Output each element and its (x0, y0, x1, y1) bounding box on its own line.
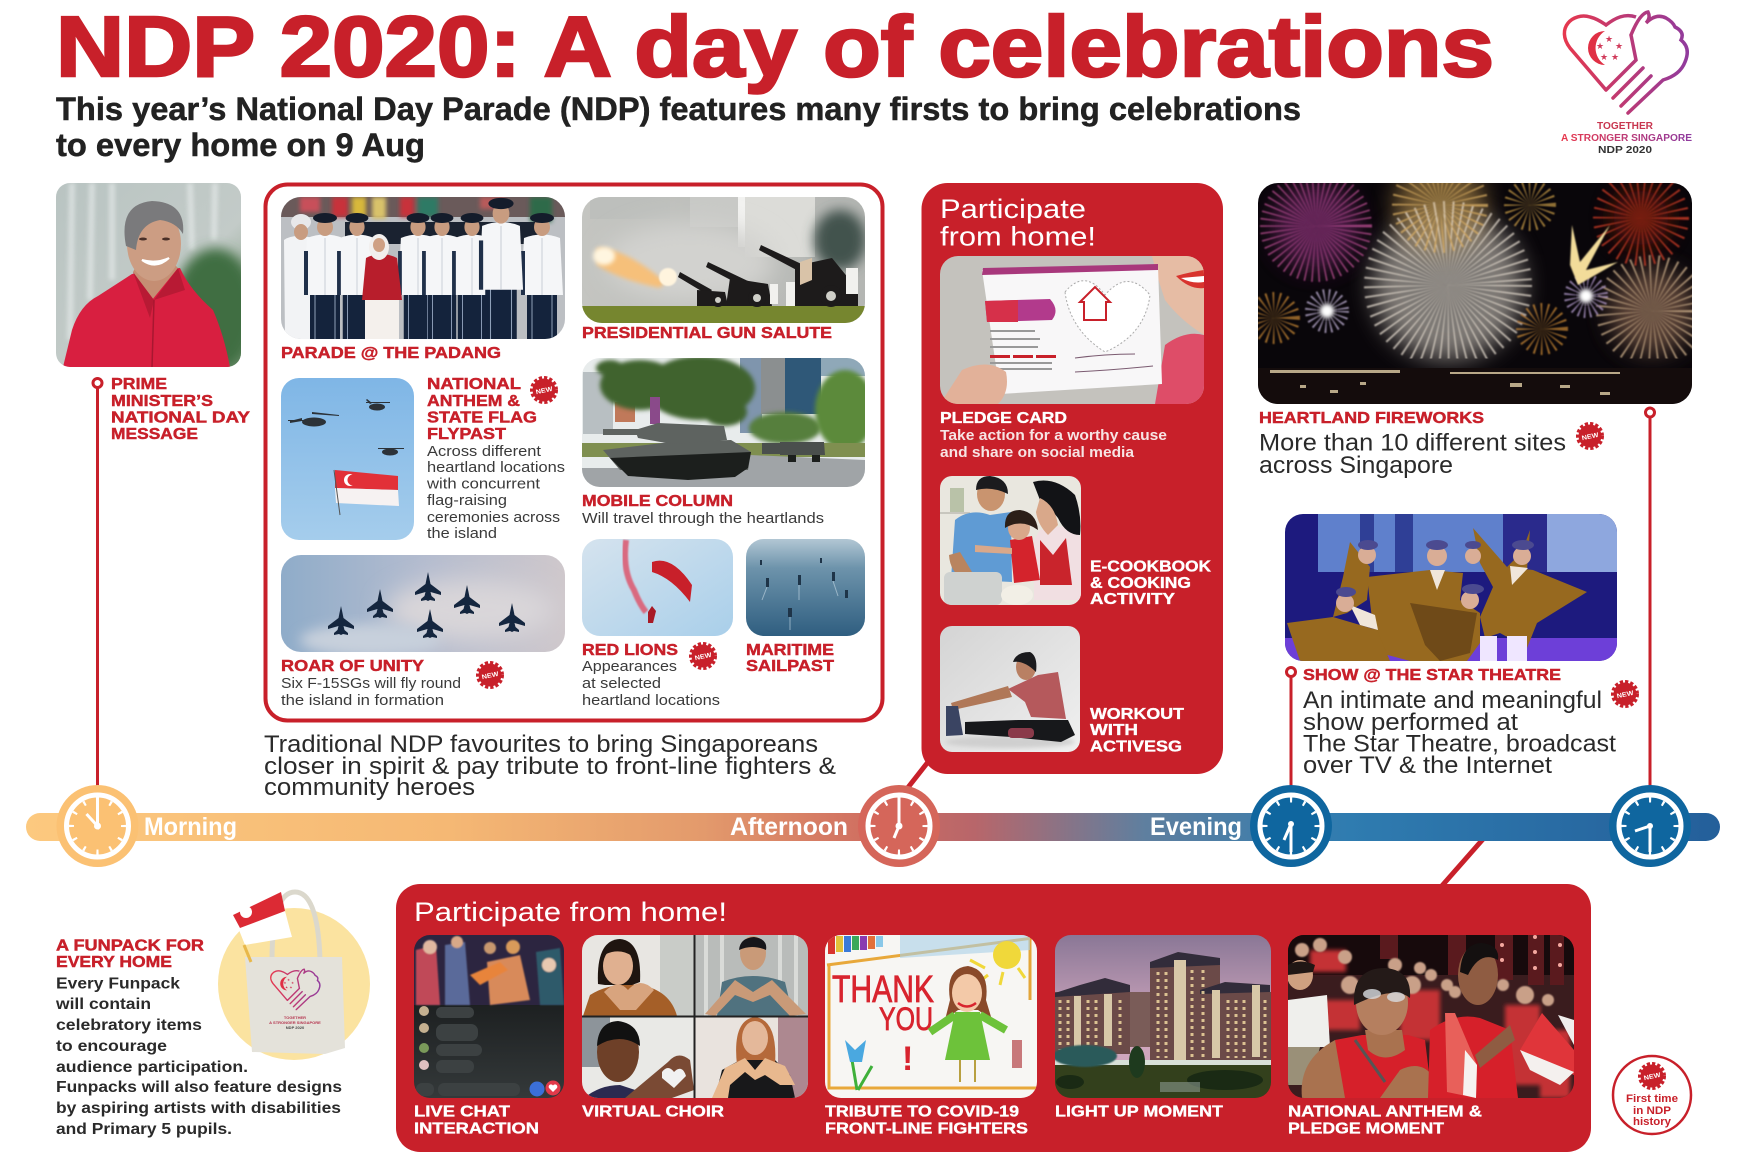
photo: workout stretching man (940, 626, 1080, 752)
label: Roar of Unity: ROAR OF UNITY (281, 658, 424, 675)
icon: new badge, flypast (532, 378, 556, 402)
photo: Mobile column tank (582, 356, 875, 487)
label: workout with ActiveSG: WITH (1090, 722, 1138, 739)
text: funpack description: EVERY HOME (56, 954, 172, 971)
clock: night (1609, 785, 1691, 867)
heading: participate from home: from home! (940, 222, 1096, 252)
photo: Maritime sailpast (746, 539, 865, 636)
icon: new badge, Red Lions (692, 644, 714, 668)
legend: first time in NDP history: in NDP (1633, 1105, 1671, 1117)
icon: new badge, fireworks (1578, 424, 1602, 448)
clock: afternoon (858, 785, 940, 867)
label: Prime Minister's National Day message: MESSAGE (111, 426, 198, 443)
label: Afternoon: Afternoon (730, 813, 848, 841)
photo: cooking family (940, 476, 1081, 605)
label: live chat interaction (414, 1104, 539, 1138)
connector: afternoon to participate panel (906, 762, 928, 790)
photo: Roar of Unity jets (281, 555, 565, 656)
legend: first time in NDP history (1613, 1056, 1691, 1134)
text: traditional favourites caption: Traditional NDP favourites to bring Singaporeans (264, 731, 818, 758)
label: show at The Star Theatre: An intimate and meaningful (1303, 687, 1602, 714)
icon: new badge, Roar of Unity (478, 664, 502, 686)
logo: NDP 2020 heart (1561, 12, 1692, 156)
label: tribute to COVID-19 front-line fighters: TRIBUTE TO COVID-19 (825, 1104, 1019, 1120)
label: Presidential gun salute: PRESIDENTIAL GUN SALUTE (582, 325, 832, 342)
text: flypast description: Across different (427, 444, 541, 460)
photo: child's thank you drawing: ! (902, 1040, 913, 1078)
logo: NDP 2020 heart: A STRONGER SINGAPORE (1561, 133, 1692, 144)
label: Red Lions: heartland locations (582, 693, 720, 709)
label: workout with ActiveSG: ACTIVESG (1090, 738, 1182, 756)
label: show at The Star Theatre: over TV & the Internet (1303, 752, 1552, 779)
label: pledge card: and share on social media (940, 445, 1135, 461)
label: workout with ActiveSG (1090, 706, 1184, 756)
panel: participate from home, afternoon (922, 183, 1223, 774)
label: Red Lions: RED LIONS (582, 642, 678, 659)
photo: child's thank you drawing (825, 935, 1037, 1098)
text: flypast description: ceremonies across (427, 510, 560, 526)
panel: traditional NDP favourites (266, 184, 882, 720)
label: Morning: Morning (144, 813, 237, 841)
label: pledge card: Take action for a worthy cause (940, 428, 1167, 444)
label: Red Lions: at selected (582, 676, 661, 692)
photo: Red Lions parachute (582, 539, 733, 636)
label: Mobile column (582, 493, 824, 527)
text: funpack description: audience participation. (56, 1059, 248, 1076)
text: funpack description: A FUNPACK FOR (56, 938, 205, 954)
photo: Parade at the Padang (281, 197, 565, 343)
label: show at The Star Theatre: The Star Theatre, broadcast (1303, 730, 1616, 758)
label: workout with ActiveSG: WORKOUT (1090, 706, 1184, 723)
title: NDP 2020: A day of celebrations (56, 0, 1494, 95)
legend: first time in NDP history: history (1633, 1116, 1672, 1128)
label: tribute to COVID-19 front-line fighters: FRONT-LINE FIGHTERS (825, 1120, 1028, 1138)
label: Maritime sailpast (746, 642, 834, 675)
photo: child's thank you drawing: THANK (832, 969, 934, 1011)
text: flypast description: with concurrent (426, 476, 540, 492)
photo: live chat (414, 935, 564, 1098)
photo: national anthem and pledge moment (1287, 935, 1574, 1098)
label: heartland fireworks: across Singapore (1259, 452, 1453, 479)
heading: National anthem and state flag flypast: FLYPAST (427, 426, 506, 443)
photo: Presidential gun salute (582, 197, 866, 324)
subtitle: to every home on 9 Aug (56, 127, 425, 163)
text: traditional favourites caption: community heroes (264, 774, 475, 801)
heading: National anthem and state flag flypast (427, 376, 537, 443)
label: Prime Minister's National Day message: NATIONAL DAY (111, 410, 250, 426)
label: Roar of Unity: Six F-15SGs will fly round (281, 676, 461, 692)
panel: participate from home, evening (396, 884, 1591, 1152)
label: live chat interaction: INTERACTION (414, 1120, 539, 1138)
text: funpack description: will contain (55, 996, 151, 1013)
label: e-cookbook (1090, 558, 1211, 608)
photo: light up moment (1052, 935, 1271, 1098)
subtitle: This year’s National Day Parade (NDP) features many firsts to bring celebrations (56, 91, 1301, 127)
text: funpack description: to encourage (56, 1038, 167, 1055)
label: Mobile column: Will travel through the heartlands (582, 511, 824, 527)
photo: virtual choir (582, 935, 808, 1098)
text: funpack description: by aspiring artists with disabilities (56, 1100, 341, 1117)
photo: pledge card (940, 256, 1204, 404)
label: heartland fireworks (1259, 410, 1566, 479)
label: national anthem and pledge moment: PLEDGE MOMENT (1288, 1120, 1444, 1138)
illustration: funpack tote bag (218, 892, 370, 1060)
heading: National anthem and state flag flypast: STATE FLAG (427, 410, 537, 426)
label: e-cookbook: ACTIVITY (1090, 591, 1175, 608)
heading: participate from home: Participate from home! (414, 897, 727, 927)
label: pledge card (940, 410, 1167, 461)
text: flypast description (426, 444, 565, 542)
clock: morning (56, 785, 138, 867)
label: heartland fireworks: More than 10 different sites (1259, 430, 1566, 456)
connector: bar to bottom panel (1440, 838, 1484, 888)
label: e-cookbook: & COOKING (1090, 575, 1191, 592)
label: light up moment: LIGHT UP MOMENT (1055, 1104, 1223, 1120)
logo: NDP 2020 heart: NDP 2020 (1598, 145, 1653, 156)
label: Prime Minister's National Day message (111, 376, 250, 443)
label: heartland fireworks: HEARTLAND FIREWORKS (1259, 410, 1484, 427)
label: Maritime sailpast: SAILPAST (746, 658, 834, 675)
illustration: funpack tote bag: NDP 2020 (286, 1025, 305, 1030)
label: tribute to COVID-19 front-line fighters (825, 1104, 1028, 1138)
photo: National anthem and state flag flypast (281, 378, 414, 540)
clock: evening (1250, 785, 1332, 867)
text: funpack description: and Primary 5 pupils. (56, 1121, 232, 1138)
label: Roar of Unity (281, 658, 461, 709)
label: Roar of Unity: the island in formation (281, 693, 444, 709)
label: show at The Star Theatre: SHOW @ THE STAR THEATRE (1303, 667, 1561, 684)
text: traditional favourites caption (264, 731, 836, 801)
label: Prime Minister's National Day message: MINISTER’S (111, 393, 213, 410)
text: flypast description: heartland locations (427, 460, 565, 476)
connector: night to fireworks (1646, 408, 1654, 786)
label: Parade at the Padang: PARADE @ THE PADANG (281, 345, 501, 362)
logo: NDP 2020 heart: TOGETHER (1597, 121, 1654, 132)
label: national anthem and pledge moment: NATIONAL ANTHEM & (1288, 1104, 1483, 1120)
connector: morning to PM message (93, 378, 102, 786)
text: funpack description (55, 938, 342, 1138)
photo: show at The Star Theatre (1285, 514, 1617, 661)
label: live chat interaction: LIVE CHAT (414, 1104, 510, 1120)
label: show at The Star Theatre: show performed at (1303, 709, 1518, 736)
text: flypast description: the island (427, 526, 497, 542)
legend: first time in NDP history: First time (1626, 1093, 1678, 1105)
label: Red Lions: Appearances (582, 659, 677, 675)
text: traditional favourites caption: closer in spirit & pay tribute to front-line fighters & (264, 753, 836, 780)
label: Mobile column: MOBILE COLUMN (582, 493, 733, 510)
text: funpack description: celebratory items (56, 1017, 202, 1034)
photo: Prime Minister (56, 183, 241, 367)
label: virtual choir: VIRTUAL CHOIR (582, 1104, 724, 1120)
label: Maritime sailpast: MARITIME (746, 642, 834, 659)
connector: evening to show (1286, 668, 1296, 786)
text: flypast description: flag-raising (427, 493, 507, 509)
subtitle (56, 91, 1301, 163)
text: funpack description: Funpacks will also feature designs (56, 1079, 342, 1096)
label: pledge card: PLEDGE CARD (940, 410, 1067, 427)
photo: child's thank you drawing: YOU (879, 1001, 933, 1037)
heading: National anthem and state flag flypast: ANTHEM & (427, 393, 520, 410)
label: e-cookbook: E-COOKBOOK (1090, 558, 1211, 576)
label: Red Lions (582, 642, 720, 709)
text: funpack description: Every Funpack (56, 976, 180, 992)
heading: participate from home: Participate (940, 194, 1086, 224)
icon: new badge, show (1614, 682, 1636, 706)
label: show at The Star Theatre (1303, 667, 1616, 779)
illustration: funpack tote bag: TOGETHER (284, 1015, 306, 1020)
label: national anthem and pledge moment (1288, 1104, 1483, 1138)
label: Prime Minister's National Day message: PRIME (111, 376, 167, 393)
heading: National anthem and state flag flypast: NATIONAL (427, 376, 521, 393)
label: Evening: Evening (1150, 813, 1242, 841)
heading: participate from home (940, 194, 1096, 252)
timeline bar (26, 813, 1720, 841)
photo: heartland fireworks (1258, 160, 1694, 404)
illustration: funpack tote bag: A STRONGER SINGAPORE (269, 1020, 321, 1025)
